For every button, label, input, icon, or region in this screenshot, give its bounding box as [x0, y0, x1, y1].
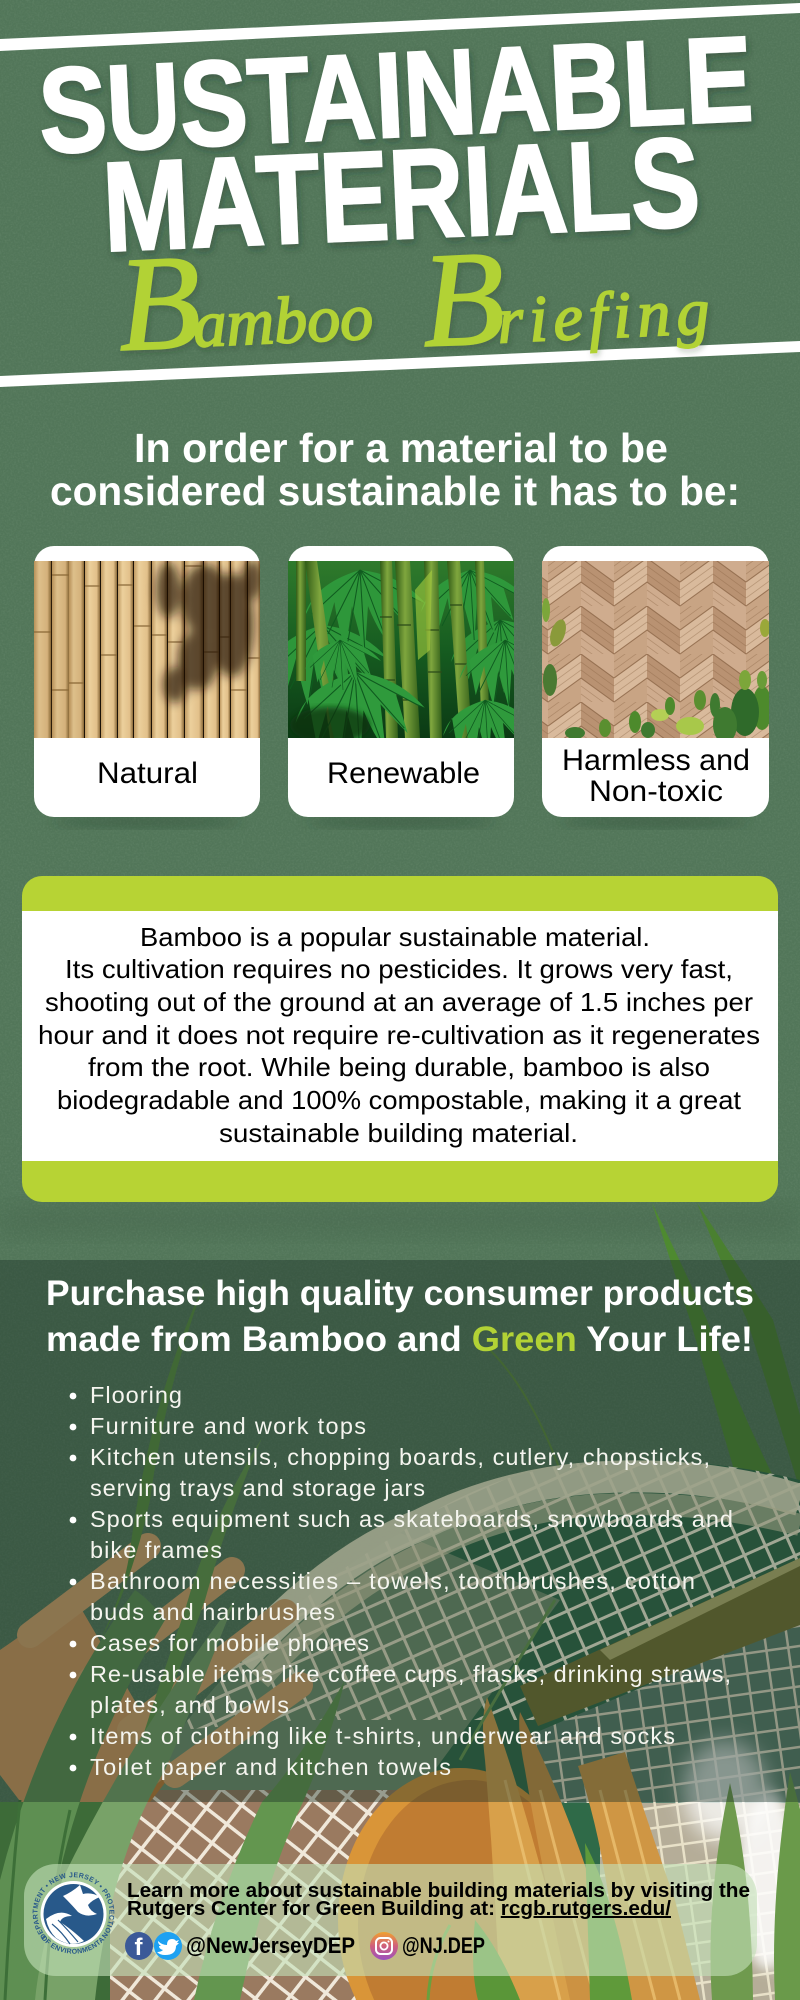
label: Harmless and	[562, 744, 750, 777]
icon: facebook	[125, 1932, 153, 1961]
list: bamboo products: Furniture and work tops	[90, 1413, 366, 1439]
net thick rim	[240, 1476, 800, 1660]
list: bamboo products: Kitchen utensils, chopping boards, cutlery, chopsticks,	[90, 1444, 710, 1470]
description text: biodegradable and 100% compostable, making it a great	[57, 1085, 742, 1115]
logo: NJ DEP seal	[32, 1872, 114, 1954]
list: bamboo products: plates, and bowls	[90, 1692, 289, 1718]
footer link text: Rutgers Center for Green Building at: rcgb.rutgers.edu/	[127, 1898, 671, 1920]
photo: bamboo poles	[34, 560, 262, 738]
handle: facebook and twitter: @NewJerseyDEP	[186, 1933, 355, 1958]
card: Harmless and Non-toxic: Non-toxic	[589, 775, 723, 808]
list: bamboo products: Flooring	[90, 1382, 182, 1408]
top diagonal white line	[0, 3, 800, 51]
list: bamboo products: buds and hairbrushes	[90, 1599, 335, 1625]
card: Renewable	[288, 546, 514, 830]
heading: purchase bamboo products: made from Bamboo and Green Your Life!	[46, 1320, 753, 1359]
description text: Bamboo is a popular sustainable material.	[140, 922, 650, 952]
photo: bamboo forest	[288, 561, 514, 738]
lower net	[95, 1790, 400, 2000]
heading: purchase bamboo products	[46, 1274, 754, 1359]
footer link text: Learn more about sustainable building materials by visiting the	[127, 1880, 750, 1902]
label: Renewable	[327, 757, 480, 790]
long leaves top right	[652, 1203, 775, 1480]
label: Natural	[97, 757, 198, 790]
title: Sustainable Materials	[36, 10, 755, 278]
subtitle: Bamboo Briefing: Briefing	[419, 214, 718, 376]
footer link text	[127, 1880, 750, 1920]
heading: purchase bamboo products: Purchase high quality consumer products	[46, 1274, 754, 1313]
description text: sustainable building material.	[219, 1118, 578, 1148]
jar region	[530, 1620, 800, 1803]
description text: Its cultivation requires no pesticides. It grows very fast,	[65, 954, 733, 984]
description text: from the root. While being durable, bamboo is also	[88, 1052, 710, 1082]
photo: bamboo products on green background	[0, 1203, 800, 2000]
card: Natural	[34, 546, 262, 827]
list: bamboo products: Toilet paper and kitchen towels	[90, 1754, 451, 1780]
list: bamboo products: bike frames	[90, 1537, 222, 1563]
icon: twitter	[154, 1932, 182, 1960]
heading: what sustainable means: In order for a material to be	[134, 425, 668, 471]
icon: instagram	[370, 1932, 398, 1960]
jar lid band	[520, 1558, 800, 1726]
panel: bamboo description	[22, 876, 778, 1202]
description text	[38, 922, 760, 1148]
logo: NJ DEP seal: OF ENVIRONMENTAL	[42, 1936, 104, 1954]
photo: woven bamboo with leaves	[542, 561, 772, 743]
beige wash over left of net	[150, 1533, 560, 1790]
leaves bottom right and center	[428, 1772, 800, 2000]
heading: what sustainable means: considered sustainable it has to be:	[50, 468, 740, 514]
subtitle: Bamboo Briefing	[115, 214, 718, 380]
wooden fork	[0, 1546, 300, 1856]
list: bamboo products: serving trays and storage jars	[90, 1475, 425, 1501]
list: bamboo products: Sports equipment such as skateboards, snowboards and	[90, 1506, 733, 1532]
list: bamboo products: Re-usable items like coffee cups, flasks, drinking straws,	[90, 1661, 731, 1687]
leaf shadows	[156, 560, 262, 703]
bamboo cutlery	[483, 1697, 580, 2000]
handle: instagram: @NJ.DEP	[402, 1933, 485, 1958]
wooden spoon	[338, 1768, 531, 2000]
long leaves left	[0, 1282, 555, 2000]
heading: what sustainable means	[50, 425, 740, 514]
description text: hour and it does not require re-cultivation as it regenerates	[38, 1020, 760, 1050]
list: bamboo products	[70, 1382, 733, 1780]
description text: shooting out of the ground at an average of 1.5 inches per	[45, 987, 753, 1017]
subtitle: Bamboo Briefing: Bamboo	[115, 220, 375, 380]
white blur behind jar	[683, 1740, 767, 1840]
list: bamboo products: Bathroom necessities – towels, toothbrushes, cotton	[90, 1568, 695, 1594]
bottom diagonal white line	[0, 341, 800, 387]
seal lettering: DEPARTMENT • NEW JERSEY • PROTECTION	[32, 1872, 114, 1940]
lower right net	[600, 1803, 800, 2000]
list: bamboo products: Items of clothing like t-shirts, underwear and socks	[90, 1723, 675, 1749]
card: Harmless and Non-toxic	[542, 546, 772, 827]
list: bamboo products: Cases for mobile phones	[90, 1630, 369, 1656]
net bag body	[160, 1461, 800, 1876]
dark overlay panel	[0, 1260, 800, 1802]
icon: facebook: f	[134, 1934, 144, 1961]
